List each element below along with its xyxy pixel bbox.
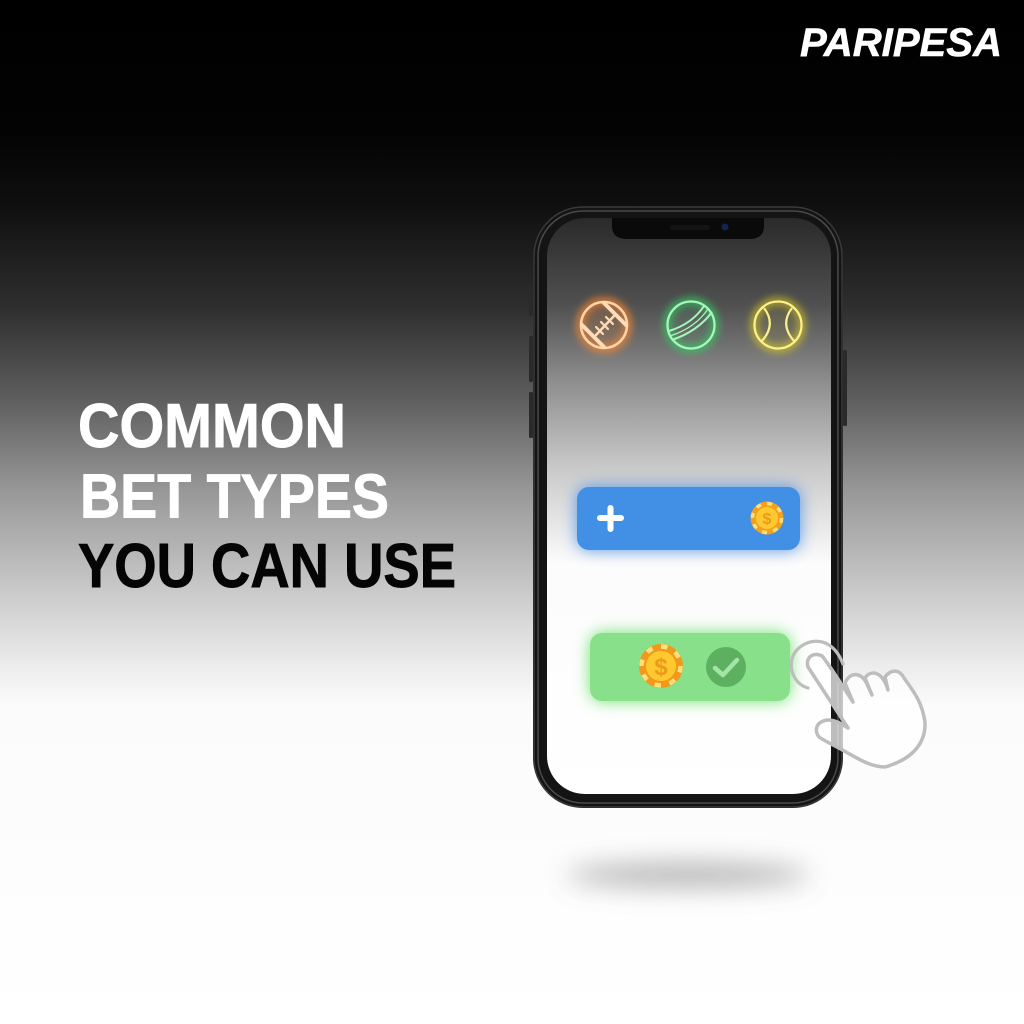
icon: plus bbox=[600, 508, 621, 529]
logo: PARIPESA: PARIPESA bbox=[800, 21, 1002, 65]
notch bbox=[612, 218, 764, 239]
phone screen bbox=[547, 218, 831, 794]
icon: large coin: $ bbox=[654, 654, 668, 681]
icon: small coin: $ bbox=[763, 511, 772, 528]
title: YOU CAN USE bbox=[78, 532, 456, 601]
phone shadow bbox=[566, 863, 810, 887]
icon: check badge bbox=[706, 647, 746, 687]
title: COMMON bbox=[78, 392, 346, 461]
phone bbox=[529, 206, 847, 808]
icon: tennis ball bbox=[754, 301, 802, 349]
blue bet button bbox=[577, 487, 800, 550]
green confirm button bbox=[590, 633, 790, 701]
speaker bbox=[670, 225, 710, 230]
side buttons bbox=[529, 288, 847, 438]
icon: large coin bbox=[639, 644, 683, 688]
title bbox=[78, 392, 456, 601]
icon: small coin bbox=[750, 502, 784, 534]
phone body bbox=[533, 206, 843, 808]
camera bbox=[722, 224, 728, 230]
title: BET TYPES bbox=[80, 462, 389, 532]
icon: american football bbox=[580, 301, 628, 349]
icon: tapping hand bbox=[791, 641, 925, 767]
icon: cricket ball bbox=[667, 301, 715, 349]
